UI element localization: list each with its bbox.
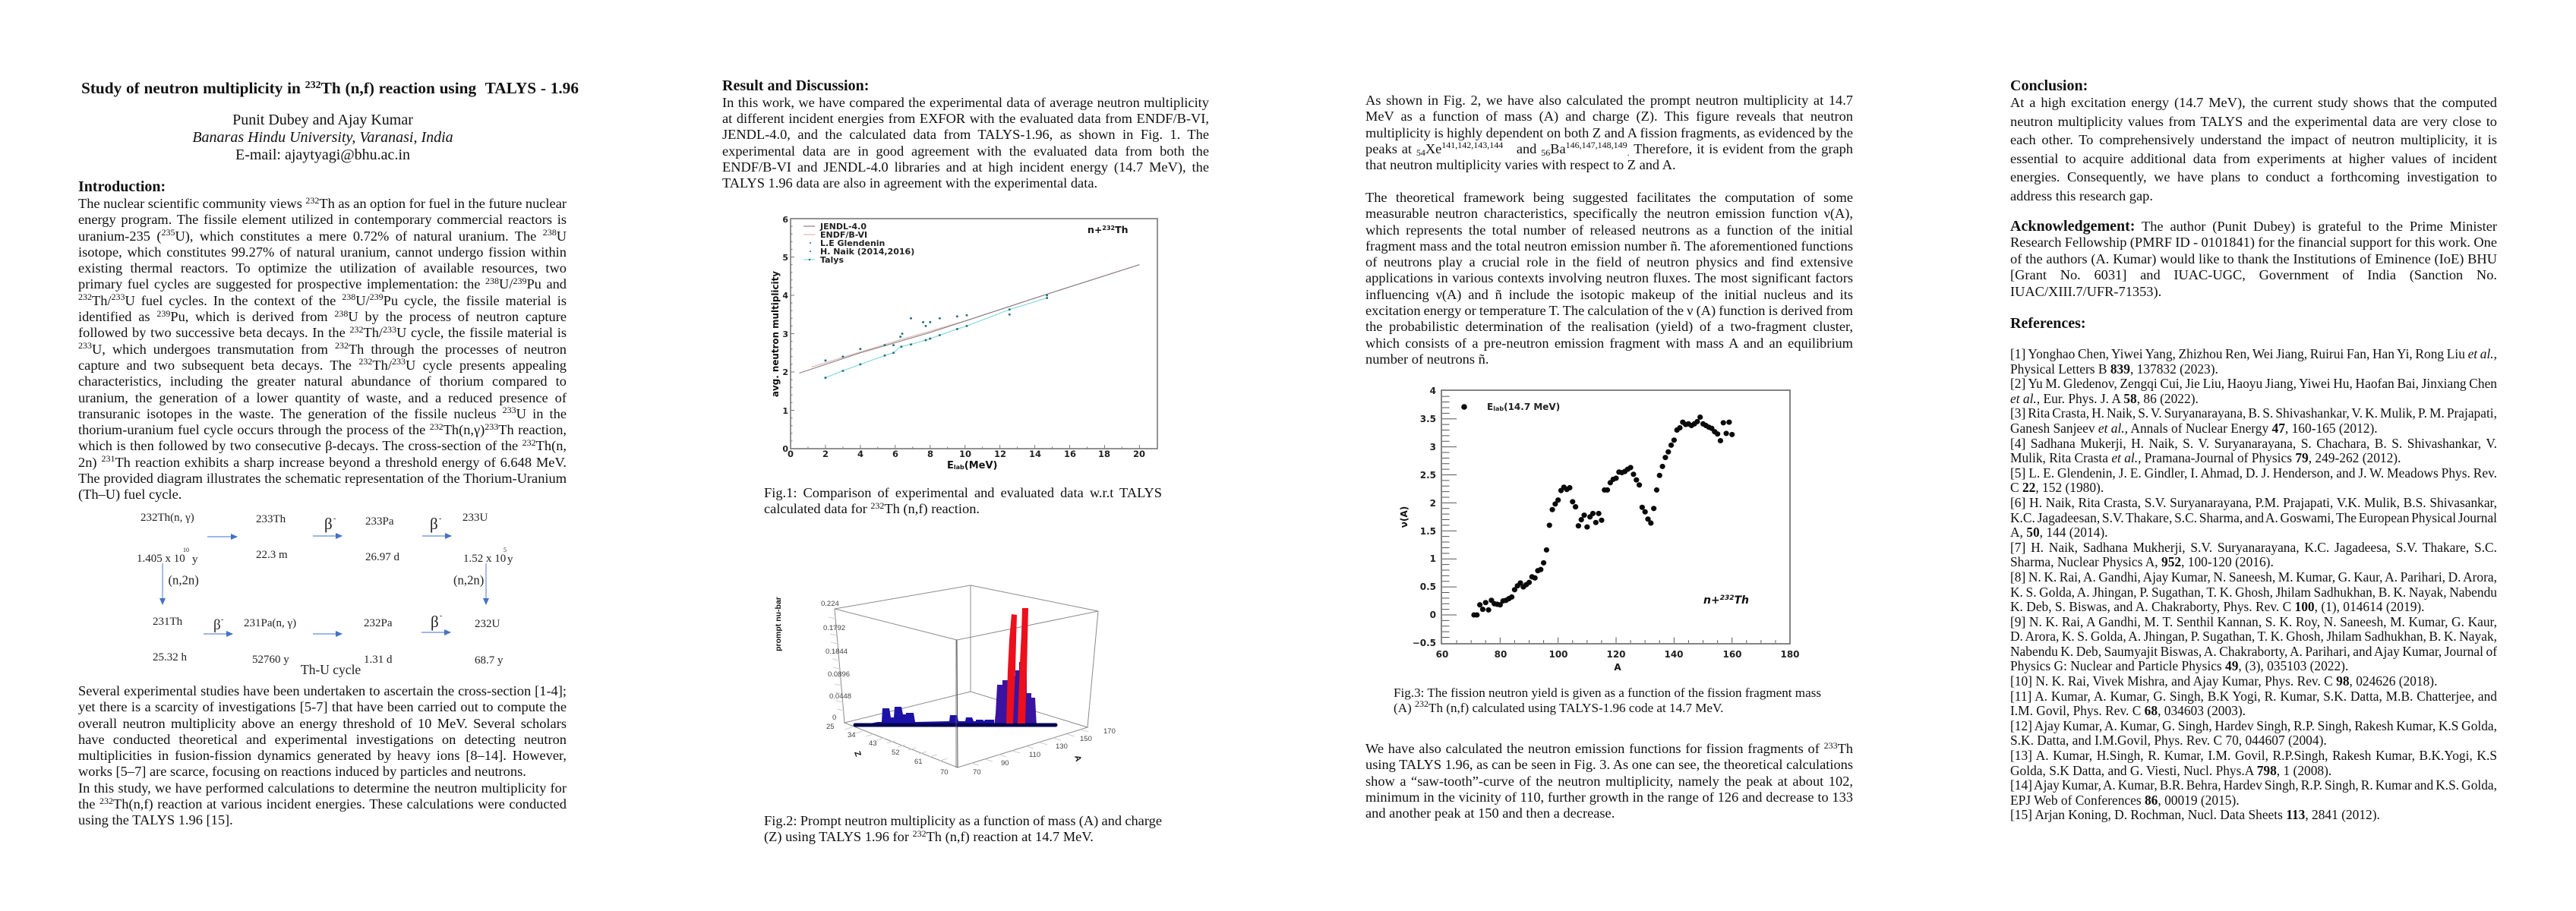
reference list: K.C. Jagadeesan, S.V. Thakare, S.C. Sharma, and A. Goswami, The European Physical Journal	[2010, 510, 2497, 525]
reference list: [5] L. E. Glendenin, J. E. Gindler, I. Ahmad, D. J. Henderson, and J. W. Meadows Phys. Rev.	[2010, 465, 2497, 481]
text block: introduction: capture and two subsequent beta decays. The 232Th/233U cycle presents appealing	[78, 356, 567, 373]
value axis labels: 0.0896	[828, 670, 850, 679]
blue low-yield bars	[854, 707, 994, 727]
reference list: et al., Eur. Phys. J. A 58, 86 (2022).	[2010, 391, 2199, 406]
caption: figure 1: Fig.1: Comparison of experimental and evaluated data w.r.t TALYS	[764, 485, 1162, 500]
text block: results intro: In this work, we have compared the experimental data of average neutron multiplicity	[722, 95, 1209, 110]
x axis tick labels: 20	[1133, 449, 1145, 459]
text block: theoretical framework: applications in various contexts involving neutron fluxes. The most significant factors	[1365, 270, 1853, 285]
text block: conclusion: energies. Consequently, we have plans to conduct a forthcoming investigation to	[2010, 169, 2497, 184]
text block: results intro: experimental data are in good agreement with the evaluated data from both the	[722, 143, 1209, 159]
x axis tick labels: 140	[1664, 649, 1684, 660]
text block: introduction: characteristics, including the greater natural abundance of thorium compared to	[78, 374, 567, 389]
text block: introduction: 233U, which undergoes transmutation from 232Th through the processes of neutron	[78, 340, 567, 357]
Z axis labels: 25	[826, 723, 835, 731]
y axis tick labels: 3	[782, 329, 788, 339]
legend	[803, 222, 914, 265]
chart: figure 3 fission neutron yield vs mass	[1399, 386, 1800, 673]
text block: results intro: at different incident energies from EXFOR with the evaluated data from ENDF/B-VI,	[722, 111, 1209, 126]
y axis tick labels: 5	[782, 253, 788, 263]
authors and affiliation: E-mail: ajaytyagi@bhu.ac.in	[235, 147, 410, 163]
Z axis labels: 70	[940, 768, 949, 777]
text block: introduction: identified as 239Pu, which is derived from 238U by the process of neutron capture	[78, 308, 567, 324]
x axis tick labels: 0	[788, 449, 794, 459]
caption: figure 3	[1394, 686, 1821, 715]
text block: acknowledgement	[2010, 218, 2497, 299]
x axis tick labels: 12	[994, 449, 1006, 459]
beta labels: -	[333, 515, 336, 523]
axis titles: ν(A)	[1399, 506, 1410, 528]
caption: figure 2: (Z) using TALYS 1.96 for 232Th (n,f) reaction at 14.7 MeV.	[764, 828, 1094, 844]
text block: figure 3 discussion: and another peak at 150 and then a decrease.	[1365, 805, 1615, 821]
text block: introduction: thorium-uranium fuel cycle occurs through the process of the 232Th(n,γ)233Th reaction,	[78, 421, 567, 437]
value axis labels: 0.0448	[829, 692, 851, 701]
y axis tick labels: 0	[1430, 610, 1436, 620]
nuclide row 1	[137, 512, 513, 566]
Z axis labels	[826, 723, 949, 777]
text block: theoretical framework: of neutrons play a crucial role in the field of neutron physics and find extensive	[1365, 254, 1853, 270]
caption: figure 1: calculated data for 232Th (n,f) reaction.	[764, 500, 980, 516]
text block: theoretical framework: measurable neutron characteristics, specifically the neutron emission function ν(A),	[1365, 206, 1853, 221]
beta labels: -	[221, 616, 223, 624]
nuclide row 1: y	[192, 553, 198, 566]
red peak bars	[1006, 608, 1028, 723]
text block: acknowledgement: of the authors (A. Kumar) would like to thank the Institutions of Eminence (IoE) BHU	[2010, 251, 2497, 266]
axis ticks	[1442, 396, 1776, 643]
text block: introduction: The nuclear scientific community views 232Th as an option for fuel in the future nuclear	[78, 194, 567, 211]
reference list: [11] A. Kumar, A. Kumar, G. Singh, B.K Yogi, R. Kumar, S.K. Datta, M.B. Chatterjee, and	[2010, 689, 2497, 704]
legend: (14.7 MeV)	[1504, 402, 1560, 412]
y axis tick labels: −0.5	[1413, 638, 1436, 648]
text block: figure 3 discussion	[1365, 739, 1853, 821]
text block: results intro: ENDF/B-VI and JENDL-4.0 libraries and at high incident energy (14.7 MeV), the	[722, 159, 1209, 175]
text block: figure 2 discussion: multiplicity is highly dependent on both Z and A fission fragments, as evidenced by the	[1365, 125, 1853, 140]
text block: acknowledgement: Research Fellowship (PMRF ID - 0101841) for the financial support for this work. One	[2010, 235, 2497, 250]
x axis tick labels: 160	[1722, 649, 1742, 660]
x axis tick labels: 8	[927, 449, 933, 459]
y axis tick labels: 4	[1430, 386, 1436, 396]
reference list: [15] Arjan Koning, D. Rochman, Nucl. Data Sheets 113, 2841 (2012).	[2010, 807, 2380, 822]
reference list: [2] Yu M. Gledenov, Zengqi Cui, Jie Liu, Haoyu Jiang, Yiwei Hu, Haofan Bai, Jinxiang Chen	[2010, 376, 2497, 391]
nuclide row 1: 5	[504, 547, 507, 553]
heading: introduction: Introduction:	[78, 178, 166, 195]
y axis tick labels: 2	[1430, 498, 1436, 509]
heading: conclusion: Conclusion:	[2010, 77, 2088, 94]
A axis labels: 130	[1056, 742, 1068, 751]
nuclide row 2	[153, 616, 504, 667]
x axis tick labels: 10	[959, 449, 971, 459]
reaction label: n+	[1088, 224, 1102, 235]
legend: ENDF/B-VI	[820, 230, 867, 240]
3D box wireframe	[835, 585, 1098, 768]
plot frame	[791, 219, 1157, 449]
data points	[824, 295, 1048, 379]
reference list: Physics G: Nuclear and Particle Physics 49, (3), 035103 (2022).	[2010, 658, 2348, 673]
beta labels: β	[324, 515, 333, 533]
reference list	[2010, 346, 2497, 822]
Z axis labels: 43	[869, 739, 877, 748]
x axis tick labels: 14	[1029, 449, 1041, 459]
caption: figure 3: (A) 232Th (n,f) calculated using TALYS-1.96 code at 14.7 MeV.	[1394, 698, 1723, 715]
y axis tick labels: 3.5	[1420, 414, 1436, 424]
text block: introduction	[78, 194, 567, 502]
reaction label: 232	[1720, 594, 1735, 602]
text block: figure 2 discussion: MeV as a function of mass (A) and charge (Z). This figure reveals that neutron	[1365, 109, 1853, 124]
text block: conclusion: At a high excitation energy (14.7 MeV), the current study shows that the computed	[2010, 95, 2497, 110]
text block: introduction: followed by two successive beta decays. In the 232Th/233U cycle, the fissile material is	[78, 324, 567, 340]
reaction label: n+	[1703, 594, 1720, 607]
reaction label: 232	[1102, 225, 1115, 232]
nuclide row 1: 233U	[462, 512, 488, 524]
reference list: C 22, 152 (1980).	[2010, 480, 2104, 495]
reference list: Ganesh Sanjeev et al., Annals of Nuclear Energy 47, 160-165 (2012).	[2010, 421, 2378, 436]
authors and affiliation: Punit Dubey and Ajay Kumar	[232, 112, 413, 128]
A axis labels: 70	[973, 768, 981, 777]
value axis labels: 0.224	[821, 600, 839, 608]
y axis tick labels: 1	[1430, 553, 1436, 564]
chart: figure 1 neutron multiplicity vs energy	[770, 215, 1158, 471]
arrows	[163, 536, 486, 634]
text block: acknowledgement: IUAC/XIII.7/UFR-71353).	[2010, 284, 2161, 299]
reference list: Nabendu K. Deb, Saumyajit Biswas, A. Chakraborty, A. Parihari, and Ajay Kumar, Journal of	[2010, 644, 2497, 659]
authors and affiliation	[192, 112, 453, 163]
value axis labels: 0	[832, 714, 836, 722]
beta labels: β	[431, 613, 439, 631]
axis titles	[1399, 506, 1621, 673]
nuclide row 1: 10	[183, 547, 189, 553]
axis titles	[774, 597, 1083, 763]
x axis tick labels: 16	[1064, 449, 1076, 459]
text block: conclusion: each other. To comprehensively understand the impact of neutron multiplicity, it is	[2010, 132, 2497, 147]
text block: theoretical framework: number of neutrons ñ.	[1365, 351, 1488, 367]
reference list: [6] H. Naik, Rita Crasta, S.V. Suryanarayana, P.M. Prajapati, V.K. Mulik, B.S. Shivasankar,	[2010, 495, 2497, 510]
legend	[1461, 402, 1560, 412]
text block: figure 3 discussion: using TALYS 1.96, as can be seen in Fig. 3. As one can see, the theoretical calculations	[1365, 757, 1853, 772]
diagram: Th-U fuel cycle	[137, 512, 513, 677]
nuclide row 2: 231Pa(n, γ)	[244, 617, 296, 629]
x axis tick labels: 6	[892, 449, 898, 459]
y axis tick labels: 1	[782, 406, 788, 416]
curves	[799, 265, 1139, 378]
x axis tick labels	[788, 449, 1145, 459]
nuclide row 2: 25.32 h	[153, 651, 187, 664]
reference list: Mulik, Rita Crasta et al., Pramana-Journal of Physics 79, 249-262 (2012).	[2010, 450, 2401, 465]
text block: results intro: TALYS 1.96 data are also in agreement with the experimental data.	[722, 175, 1097, 191]
reference list: [14] Ajay Kumar, A. Kumar, B.R. Behra, Hardev Singh, R.P. Singh, R. Kumar and K.S. Golda,	[2010, 777, 2497, 793]
legend: lab	[1493, 405, 1504, 412]
reaction label: Th	[1735, 594, 1749, 607]
axis ticks	[829, 617, 1088, 765]
text block: theoretical framework: The theoretical framework being suggested facilitates the computation of some	[1365, 190, 1853, 205]
text block: prior studies: yet there is a scarcity of investigations [5-7] that have been carried out to compute the	[78, 699, 567, 714]
text block: results intro	[722, 95, 1209, 191]
y axis tick labels: 4	[782, 291, 788, 301]
beta labels: -	[439, 515, 441, 523]
nuclide row 1: 1.52 x 10	[463, 553, 506, 565]
x axis tick labels: 180	[1780, 649, 1800, 660]
y axis tick labels	[1413, 386, 1436, 648]
y axis tick labels: 0.5	[1420, 582, 1436, 592]
x axis tick labels: 4	[857, 449, 863, 459]
text block: prior studies	[78, 683, 567, 827]
axis titles: lab	[954, 464, 964, 471]
text block: prior studies: the 232Th(n,f) reaction at various incident energies. These calculations were conducted	[78, 796, 567, 812]
text block: prior studies: have conducted theoretical and experimental investigations on detecting neutron	[78, 732, 567, 747]
text block: figure 3 discussion: minimum in the vicinity of 110, further growth in the range of 126 and decrease to 133	[1365, 790, 1853, 805]
reference list: [10] N. K. Rai, Vivek Mishra, and Ajay Kumar, Phys. Rev. C 98, 024626 (2018).	[2010, 673, 2437, 689]
beta labels: -	[440, 612, 442, 620]
reference list: [7] H. Naik, Sadhana Mukherji, S.V. Suryanarayana, K.C. Jagadeesa, S.V. Thakare, S.C.	[2010, 540, 2497, 555]
y axis tick labels: 3	[1430, 442, 1436, 452]
text block: introduction: which is then followed by two consecutive β-decays. The cross-section of the 232Th(n,	[78, 437, 567, 453]
text block: introduction: 232Th/233U fuel cycles. In the context of the 238U/239Pu cycle, the fissile material is	[78, 292, 567, 308]
text block: figure 2 discussion: As shown in Fig. 2, we have also calculated the prompt neutron multiplicity at 14.7	[1365, 93, 1853, 108]
text block: prior studies: In this study, we have performed calculations to determine the neutron multiplicity for	[78, 780, 567, 796]
text block: acknowledgement: [Grant No. 6031] and IUAC-UGC, Government of India (Sanction No.	[2010, 267, 2497, 282]
text block: prior studies: multiplicities in fusion-fission dynamics generated by heavy ions [8–14]. However,	[78, 748, 567, 763]
x axis tick labels	[1436, 649, 1800, 660]
text block: introduction: transuranic isotopes in the waste. The generation of the fissile nucleus 233U in the	[78, 405, 567, 421]
text block: prior studies: works [5–7] are scarce, focusing on reactions induced by particles and neutrons.	[78, 764, 526, 779]
Z axis labels: 52	[892, 749, 900, 757]
nuclide row 2: 232U	[475, 618, 500, 630]
text block: introduction: primary fuel cycles are suggested for prospective implementation: the 238U/239Pu and	[78, 276, 567, 292]
title: Study of neutron multiplicity in 232Th (n,f) reaction using TALYS - 1.96	[81, 79, 579, 97]
A axis labels	[973, 727, 1116, 777]
y axis tick labels: 2.5	[1420, 470, 1436, 481]
axis titles	[770, 271, 997, 471]
reference list: I.M. Govil, Phys. Rev. C 68, 034603 (2003).	[2010, 703, 2246, 718]
beta labels: β	[430, 515, 438, 533]
axis titles: (MeV)	[964, 460, 997, 471]
reference list: A, 50, 144 (2014).	[2010, 525, 2108, 540]
text block: results intro: JENDL-4.0, and the calculated data from TALYS-1.96, as shown in Fig. 1. The	[722, 127, 1209, 142]
caption: figure 1	[764, 485, 1162, 516]
legend: H. Naik (2014,2016)	[820, 247, 914, 257]
text block: introduction: energy program. The fissile element utilized in contemporary commercial reactors is	[78, 212, 567, 227]
A axis labels: 110	[1029, 751, 1040, 759]
reference list: K. Deb, S. Biswas, and A. Chakraborty, Phys. Rev. C 100, (1), 014614 (2019).	[2010, 599, 2425, 614]
value axis labels	[821, 600, 851, 722]
diagram caption: Th-U cycle	[301, 662, 361, 677]
caption: figure 2	[764, 813, 1162, 844]
x axis tick labels: 80	[1495, 649, 1507, 660]
x axis tick labels: 120	[1606, 649, 1626, 660]
heading: references: References:	[2010, 315, 2086, 332]
x axis tick labels: 18	[1098, 449, 1110, 459]
nuclide row 1: 233Th	[256, 513, 286, 525]
y axis tick labels: 6	[782, 215, 788, 225]
value axis labels: 0.1844	[826, 648, 848, 656]
reference list: [3] Rita Crasta, H. Naik, S. V. Suryanarayana, B. S. Shivashankar, V. K. Mulik, P. M. Prajapati,	[2010, 405, 2497, 421]
axis titles: prompt nu-bar	[774, 597, 783, 651]
base strip	[855, 723, 1056, 727]
text block: theoretical framework: the probabilistic determination of the realisation (yield) of a two-fragment cluster,	[1365, 319, 1853, 334]
y axis tick labels: 1.5	[1420, 526, 1436, 537]
text block: theoretical framework: fragment mass and the total neutron emission number ñ. The aforementioned functions	[1365, 238, 1853, 254]
text block: introduction: uranium, the generation of a lower quantity of waste, and a reduced presence of	[78, 390, 567, 405]
y axis tick labels: 0	[782, 444, 788, 454]
text block: conclusion: essential to acquire additional data from experiments at higher values of incident	[2010, 151, 2497, 166]
nuclide row 2: 68.7 y	[475, 654, 504, 667]
A axis labels: 170	[1103, 727, 1116, 736]
text block: prior studies: using the TALYS 1.96 [15].	[78, 812, 233, 827]
Z axis labels: 61	[914, 758, 923, 766]
axis titles: E	[947, 460, 954, 471]
text block: theoretical framework: influencing ν(A) and ñ include the isotopic makeup of the initial nucleus and its	[1365, 287, 1853, 302]
axis titles: Z	[852, 750, 863, 758]
text block: acknowledgement: Acknowledgement: The author (Punit Dubey) is grateful to the Prime Minister	[2010, 218, 2497, 235]
text block: figure 2 discussion: peaks at 54Xe141,142,143,144 and 56Ba146,147,148,149. Therefore, it is evident from the graph	[1365, 140, 1853, 158]
text block: introduction: (Th–U) fuel cycle.	[78, 487, 182, 502]
text block: theoretical framework	[1365, 190, 1853, 367]
axis titles: A	[1614, 662, 1621, 673]
reference list: EPJ Web of Conferences 86, 00019 (2015).	[2010, 793, 2240, 808]
caption: figure 3: Fig.3: The fission neutron yield is given as a function of the fission fragment mass	[1394, 686, 1821, 700]
y axis tick labels: 2	[782, 367, 788, 377]
nuclide row 2: 52760 y	[252, 654, 289, 666]
text block: introduction: isotope, which constitutes 99.27% of natural uranium, cannot undergo fission within	[78, 244, 567, 260]
x axis tick labels: 60	[1436, 649, 1448, 660]
nuclide row 2: 231Th	[153, 616, 183, 628]
purple high-yield bars	[994, 662, 1037, 727]
reference list: [12] Ajay Kumar, A. Kumar, G. Singh, Hardev Singh, R.P. Singh, Rakesh Kumar, K.S Golda,	[2010, 718, 2497, 733]
authors and affiliation: Banaras Hindu University, Varanasi, India	[192, 129, 453, 146]
(n,2n) labels: (n,2n)	[453, 572, 484, 588]
beta labels	[213, 515, 442, 633]
axis titles: A	[1072, 755, 1083, 763]
text block: conclusion: address this research gap.	[2010, 188, 2153, 203]
text block: prior studies: Several experimental studies have been undertaken to ascertain the cross-section [1-4];	[78, 683, 567, 698]
text block: theoretical framework: which represents the total number of released neutrons as a function of the initial	[1365, 222, 1853, 238]
nuclide row 1: 26.97 d	[365, 551, 399, 563]
text block: theoretical framework: excitation energy or temperature T. The calculation of the ν (A) function is derived from	[1365, 303, 1853, 318]
legend: L.E Glendenin	[820, 238, 885, 248]
heading: result and discussion: Result and Discussion:	[722, 77, 869, 94]
x axis tick labels: 2	[822, 449, 829, 459]
nuclide row 2: 1.31 d	[364, 654, 393, 666]
reference list: [13] A. Kumar, H.Singh, R. Kumar, I.M. Govil, R.P.Singh, Rakesh Kumar, B.K.Yogi, K.S	[2010, 748, 2497, 763]
text block: figure 2 discussion: that neutron multiplicity varies with respect to Z and A.	[1365, 157, 1676, 172]
reference list: [4] Sadhana Mukerji, H. Naik, S. V. Suryanarayana, S. Chachara, B. S. Shivashankar, V.	[2010, 436, 2497, 451]
value axis labels: 0.1792	[823, 624, 845, 632]
reference list: Golda, S.K Datta, and G. Viesti, Nucl. Phys.A 798, 1 (2008).	[2010, 763, 2331, 778]
reference list: Sharma, Nuclear Physics A, 952, 100-120 (2016).	[2010, 554, 2274, 569]
A axis labels: 150	[1080, 735, 1092, 743]
nuclide row 2: 232Pa	[364, 617, 393, 629]
text block: theoretical framework: which consists of a pre-neutron emission fragment with mass A and an equilibrium	[1365, 336, 1853, 351]
nuclide row 1: 22.3 m	[256, 549, 288, 561]
y axis tick labels	[782, 215, 788, 454]
(n,2n) labels: (n,2n)	[169, 572, 199, 588]
reference list: D. Arora, K. S. Golda, A. Jhingan, P. Sugathan, T. K. Ghosh, Jhilam Sadhukhan, B. K. Nayak,	[2010, 629, 2497, 644]
(n,2n) labels	[169, 572, 484, 588]
reaction label: Th	[1115, 224, 1129, 235]
text block: introduction: 2n) 231Th reaction exhibits a sharp increase beyond a threshold energy of 6.648 MeV.	[78, 453, 567, 470]
reference list: [8] N. K. Rai, A. Gandhi, Ajay Kumar, N. Saneesh, M. Kumar, G. Kaur, A. Parihari, D. Arora,	[2010, 569, 2497, 585]
text block: figure 3 discussion: show a “saw-tooth”-curve of the neutron multiplicity, namely the peak at about 102,	[1365, 774, 1853, 789]
nuclide row 1: 1.405 x 10	[137, 553, 185, 565]
text block: introduction: existing thermal reactors. To optimize the utilization of available resources, two	[78, 260, 567, 276]
axis ticks	[791, 226, 1139, 449]
reference list: Physical Letters B 839, 137832 (2023).	[2010, 361, 2218, 377]
reference list: S.K. Datta, and I.M.Govil, Phys. Rev. C 70, 044607 (2004).	[2010, 733, 2327, 748]
nuclide row 1: y	[507, 553, 513, 566]
axis titles: avg. neutron multiplicity	[770, 271, 781, 397]
A axis labels: 90	[1001, 759, 1009, 768]
text block: prior studies: overall neutron multiplicity above an energy threshold of 10 MeV. Several scholars	[78, 716, 567, 731]
reference list: K. S. Golda, A. Jhingan, P. Sugathan, T. K. Ghosh, Jhilam Sadhukhan, B. K. Nayak, Nabendu	[2010, 585, 2497, 600]
reference list: [9] N. K. Rai, A Gandhi, M. T. Senthil Kannan, S. K. Roy, N. Saneesh, M. Kumar, G. Kaur,	[2010, 614, 2497, 629]
plot frame	[1441, 390, 1790, 644]
reference list: [1] Yonghao Chen, Yiwei Yang, Zhizhou Ren, Wei Jiang, Ruirui Fan, Han Yi, Rong Liu et al.,	[2010, 346, 2497, 361]
Z axis labels: 34	[848, 731, 856, 739]
text block: introduction: uranium-235 (235U), which constitutes a mere 0.72% of natural uranium. The 238U	[78, 227, 567, 244]
beta labels: β	[213, 617, 221, 633]
legend: Talys	[820, 255, 844, 265]
text block: figure 2 discussion	[1365, 93, 1853, 172]
data points	[1471, 415, 1735, 618]
text block: figure 3 discussion: We have also calculated the neutron emission functions for fission fragments of 233Th	[1365, 739, 1853, 756]
text block: introduction: The provided diagram illustrates the schematic representation of the Thorium-Uranium	[78, 471, 567, 486]
text block: conclusion	[2010, 95, 2497, 203]
legend: JENDL-4.0	[819, 222, 867, 232]
text block: conclusion: neutron multiplicity values from TALYS and the experimental data are very close to	[2010, 114, 2497, 129]
chart: figure 2 prompt neutron multiplicity 3D	[774, 585, 1116, 777]
nuclide row 1: 233Pa	[365, 515, 394, 528]
legend: E	[1487, 402, 1493, 412]
x axis tick labels: 100	[1548, 649, 1568, 660]
nuclide row 1: 232Th(n, γ)	[140, 512, 194, 524]
caption: figure 2: Fig.2: Prompt neutron multiplicity as a function of mass (A) and charge	[764, 813, 1162, 828]
